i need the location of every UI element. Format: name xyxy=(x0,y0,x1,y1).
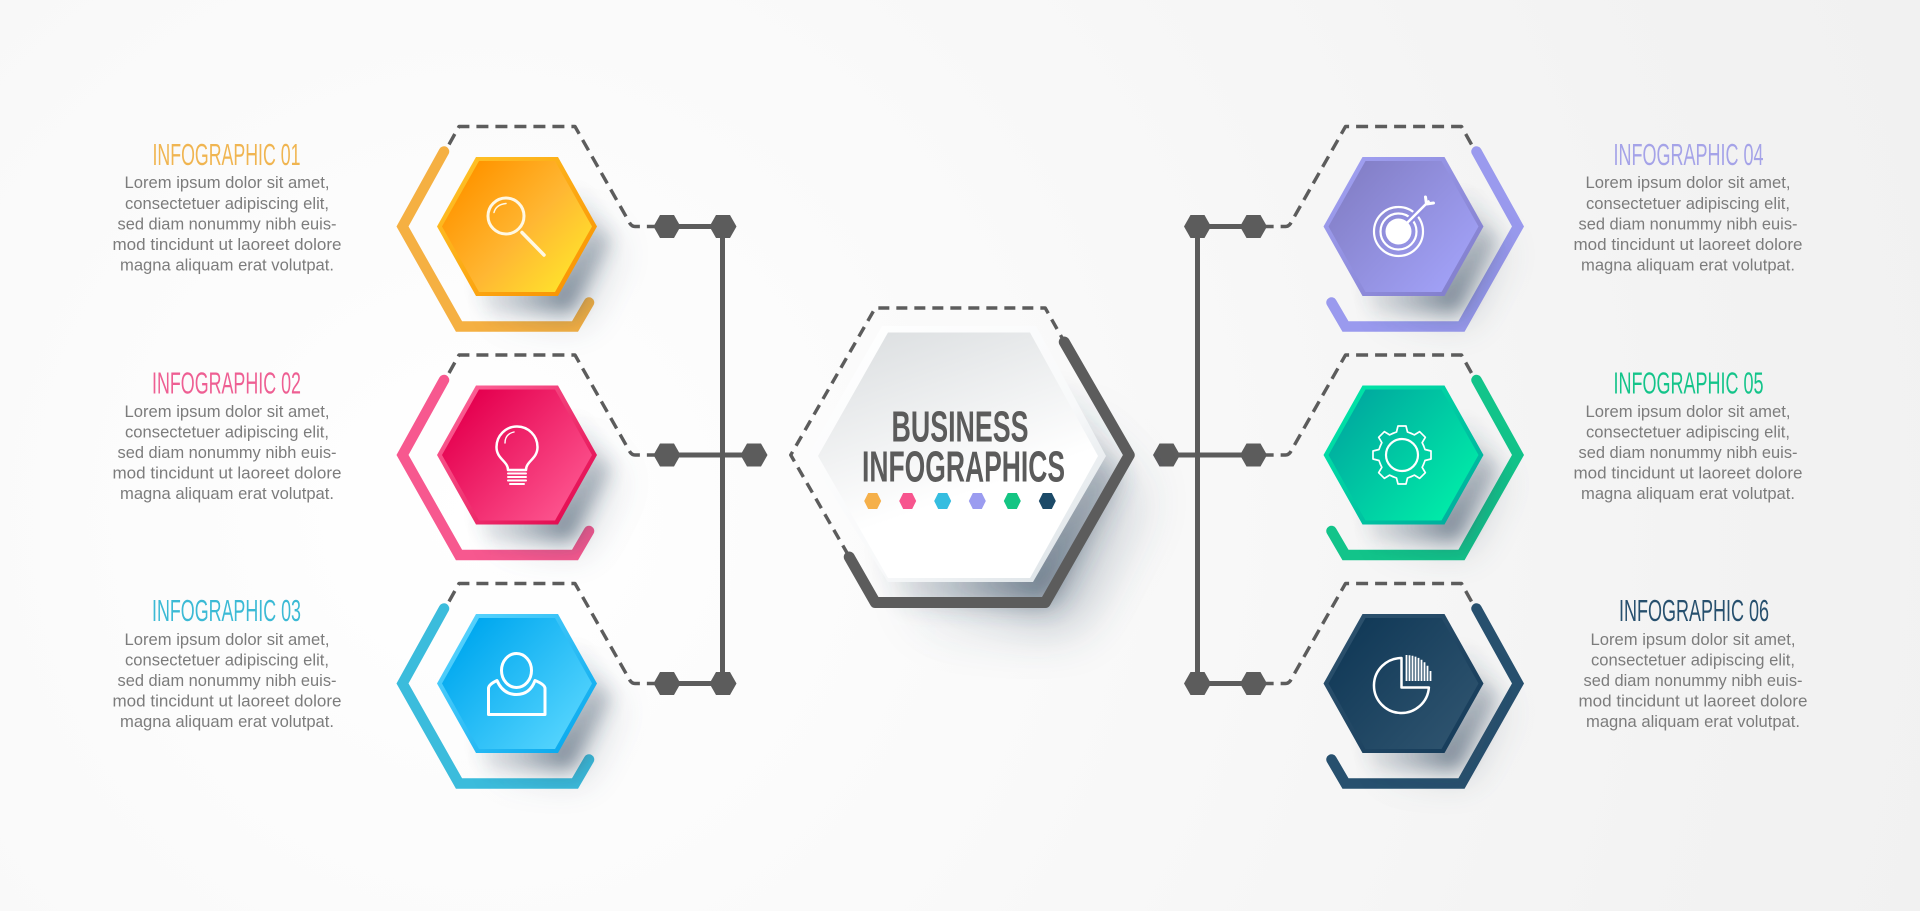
text 06: sed diam nonummy nibh euis- xyxy=(1584,672,1802,690)
text 03: sed diam nonummy nibh euis- xyxy=(118,672,336,690)
text 06: consectetuer adipiscing elit, xyxy=(1591,652,1795,670)
text 05: sed diam nonummy nibh euis- xyxy=(1578,444,1798,462)
text 04: magna aliquam erat volutpat. xyxy=(1581,256,1795,274)
text 04: sed diam nonummy nibh euis- xyxy=(1578,216,1798,234)
panel: infographic 01 xyxy=(112,126,655,326)
dashed outline 06 xyxy=(1266,584,1472,684)
text 02: consectetuer adipiscing elit, xyxy=(125,424,329,442)
text 01 xyxy=(112,174,342,274)
panel: infographic 03 xyxy=(112,584,655,784)
text 05: mod tincidunt ut laoreet dolore xyxy=(1574,464,1802,482)
right connector network xyxy=(1153,215,1267,695)
text 01: mod tincidunt ut laoreet dolore xyxy=(112,236,342,254)
hexagon 02 xyxy=(437,386,597,524)
center thick outline xyxy=(849,342,1129,602)
text 01: consectetuer adipiscing elit, xyxy=(125,195,329,213)
title 06: INFOGRAPHIC 06 xyxy=(1619,593,1769,628)
icon: gear xyxy=(1373,426,1431,484)
hexagon 05 xyxy=(1324,386,1484,524)
panel: infographic 05 xyxy=(1266,355,1802,555)
text 04: Lorem ipsum dolor sit amet, xyxy=(1586,174,1790,192)
title 03: INFOGRAPHIC 03 xyxy=(152,593,301,628)
colored outline 02 xyxy=(402,380,589,555)
title 02: INFOGRAPHIC 02 xyxy=(152,366,301,400)
text 01: magna aliquam erat volutpat. xyxy=(120,256,334,274)
icon: magnifier xyxy=(488,198,544,255)
text 05: magna aliquam erat volutpat. xyxy=(1581,485,1795,503)
text 05: consectetuer adipiscing elit, xyxy=(1586,424,1790,442)
colored outline 01 xyxy=(402,152,589,326)
left connector network xyxy=(654,215,768,695)
text 03 xyxy=(112,631,342,731)
text 05: Lorem ipsum dolor sit amet, xyxy=(1586,403,1790,421)
text 06: magna aliquam erat volutpat. xyxy=(1586,713,1800,731)
text 03: magna aliquam erat volutpat. xyxy=(120,713,334,731)
text 02: magna aliquam erat volutpat. xyxy=(120,485,334,503)
text 02: sed diam nonummy nibh euis- xyxy=(118,444,336,462)
panel: infographic 06 xyxy=(1266,584,1808,784)
hexagon 03 xyxy=(437,614,597,753)
center title: BUSINESS xyxy=(892,403,1028,452)
text 02 xyxy=(112,403,342,503)
center title: INFOGRAPHICS xyxy=(862,443,1065,492)
title 01: INFOGRAPHIC 01 xyxy=(152,137,300,172)
colored outline 05 xyxy=(1332,380,1518,555)
icon: target xyxy=(1374,197,1434,256)
panel: infographic 04 xyxy=(1266,126,1802,326)
text 04 xyxy=(1574,174,1802,274)
text 05 xyxy=(1574,403,1802,503)
panel: infographic 02 xyxy=(112,355,655,555)
hexagon 06 xyxy=(1324,614,1484,753)
text 06: Lorem ipsum dolor sit amet, xyxy=(1590,631,1796,649)
text 04: consectetuer adipiscing elit, xyxy=(1586,195,1790,213)
text 01: sed diam nonummy nibh euis- xyxy=(118,216,336,234)
text 03: consectetuer adipiscing elit, xyxy=(125,652,329,670)
hexagon 04 xyxy=(1324,157,1484,296)
colored outline 06 xyxy=(1332,608,1518,784)
dashed outline 04 xyxy=(1266,126,1472,226)
icon: pie chart xyxy=(1374,655,1430,713)
colored outline 03 xyxy=(402,608,589,784)
icon: light bulb xyxy=(496,426,538,484)
hexagon 01 xyxy=(437,157,597,296)
text 04: mod tincidunt ut laoreet dolore xyxy=(1574,236,1802,254)
dashed outline 03 xyxy=(449,584,655,684)
dashed outline 02 xyxy=(449,355,655,455)
center dashed outline xyxy=(791,308,1063,555)
title 05: INFOGRAPHIC 05 xyxy=(1614,366,1764,400)
panel: center hexagon xyxy=(791,308,1142,625)
icon: person xyxy=(488,654,545,714)
text 03: mod tincidunt ut laoreet dolore xyxy=(112,692,342,710)
text 01: Lorem ipsum dolor sit amet, xyxy=(124,174,330,192)
center colored dots xyxy=(864,493,1056,509)
text 02: Lorem ipsum dolor sit amet, xyxy=(124,403,330,421)
text 02: mod tincidunt ut laoreet dolore xyxy=(112,464,342,482)
dashed outline 05 xyxy=(1266,355,1472,455)
center title xyxy=(862,403,1065,492)
text 06 xyxy=(1578,631,1808,731)
dashed outline 01 xyxy=(449,126,655,226)
text 06: mod tincidunt ut laoreet dolore xyxy=(1578,692,1808,710)
title 04: INFOGRAPHIC 04 xyxy=(1614,137,1764,172)
colored outline 04 xyxy=(1332,152,1518,326)
text 03: Lorem ipsum dolor sit amet, xyxy=(124,631,330,649)
center hexagon face xyxy=(808,326,1106,582)
